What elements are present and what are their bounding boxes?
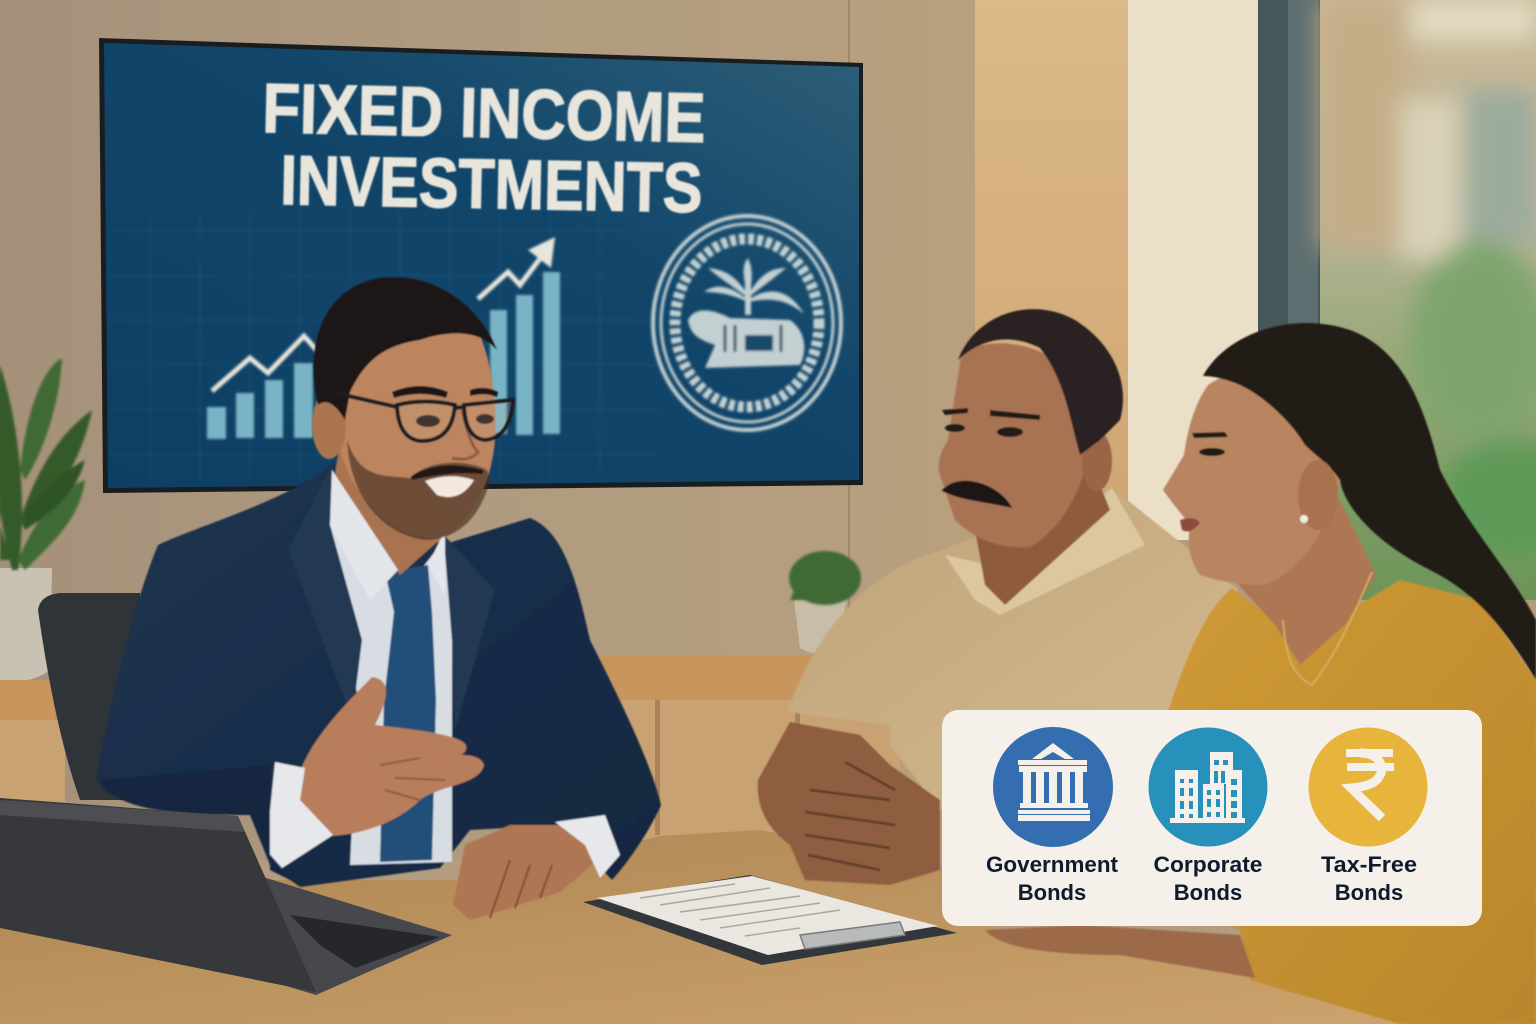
credenza (0, 655, 900, 850)
label: Corporate (1154, 852, 1262, 877)
face (1163, 371, 1340, 585)
label: Bonds (1174, 880, 1242, 905)
finger lines (380, 758, 445, 800)
corporate bonds (1148, 728, 1268, 905)
collar (330, 470, 445, 600)
advisor (96, 277, 661, 920)
table (0, 830, 1412, 1024)
laptop (0, 798, 452, 995)
mustard top (1168, 580, 1536, 1024)
window view (1320, 0, 1536, 600)
beige shirt (787, 488, 1238, 810)
icon: bank building (993, 727, 1113, 847)
moustache (945, 483, 1008, 505)
suit jacket (96, 462, 661, 887)
necklace (1283, 572, 1372, 685)
emblem (653, 216, 841, 430)
label: Bonds (1018, 880, 1086, 905)
lapel right (444, 535, 495, 730)
plant: left (0, 358, 92, 681)
arms and clasped hands (758, 722, 940, 885)
hair (314, 277, 497, 420)
forearm (985, 925, 1255, 978)
screen title: FIXED INCOME (262, 69, 706, 157)
hair (958, 309, 1123, 455)
cuff (266, 762, 333, 868)
brows and eyes (392, 386, 498, 427)
eyes (942, 408, 1040, 437)
lips (1180, 518, 1200, 531)
ear (1082, 431, 1112, 491)
card: bond categories (942, 710, 1482, 926)
screen title: INVESTMENTS (280, 141, 703, 227)
moustache (412, 467, 483, 478)
bar chart with arrows (207, 237, 560, 439)
client: man (758, 309, 1238, 885)
resting hand fingers (490, 860, 552, 918)
ear (1298, 460, 1338, 530)
icon: office towers (1148, 728, 1268, 846)
neck (975, 460, 1110, 605)
fingers (805, 762, 895, 870)
glasses (335, 393, 513, 441)
screen title (262, 69, 706, 227)
neck (335, 440, 450, 575)
hair (1203, 323, 1536, 680)
face (939, 343, 1090, 547)
plant: small on credenza (789, 551, 861, 653)
lapel (288, 465, 362, 720)
tax-free bonds (1308, 728, 1428, 905)
icon: rupee (1308, 728, 1428, 846)
screen grid (108, 210, 660, 480)
face (338, 331, 495, 537)
label: Tax-Free (1321, 852, 1417, 877)
ear (312, 391, 346, 459)
label: Bonds (1335, 880, 1403, 905)
neck (1225, 500, 1376, 665)
government bonds (986, 727, 1119, 905)
client: woman (985, 323, 1536, 1024)
beard (347, 440, 490, 540)
shirt (330, 470, 452, 865)
chair (38, 593, 140, 800)
earring (1300, 515, 1308, 523)
tie (380, 565, 436, 862)
office background (0, 0, 1320, 860)
collar (945, 488, 1145, 615)
right cuff (555, 815, 620, 878)
nose (452, 410, 478, 459)
smile (425, 476, 474, 497)
clipboard document (583, 875, 957, 965)
resting hand (453, 825, 598, 920)
gesturing hand (292, 677, 484, 836)
label: Government (986, 852, 1119, 877)
wall-mounted screen (99, 38, 863, 493)
sleeve (100, 765, 300, 885)
eye and brow (1192, 432, 1228, 456)
